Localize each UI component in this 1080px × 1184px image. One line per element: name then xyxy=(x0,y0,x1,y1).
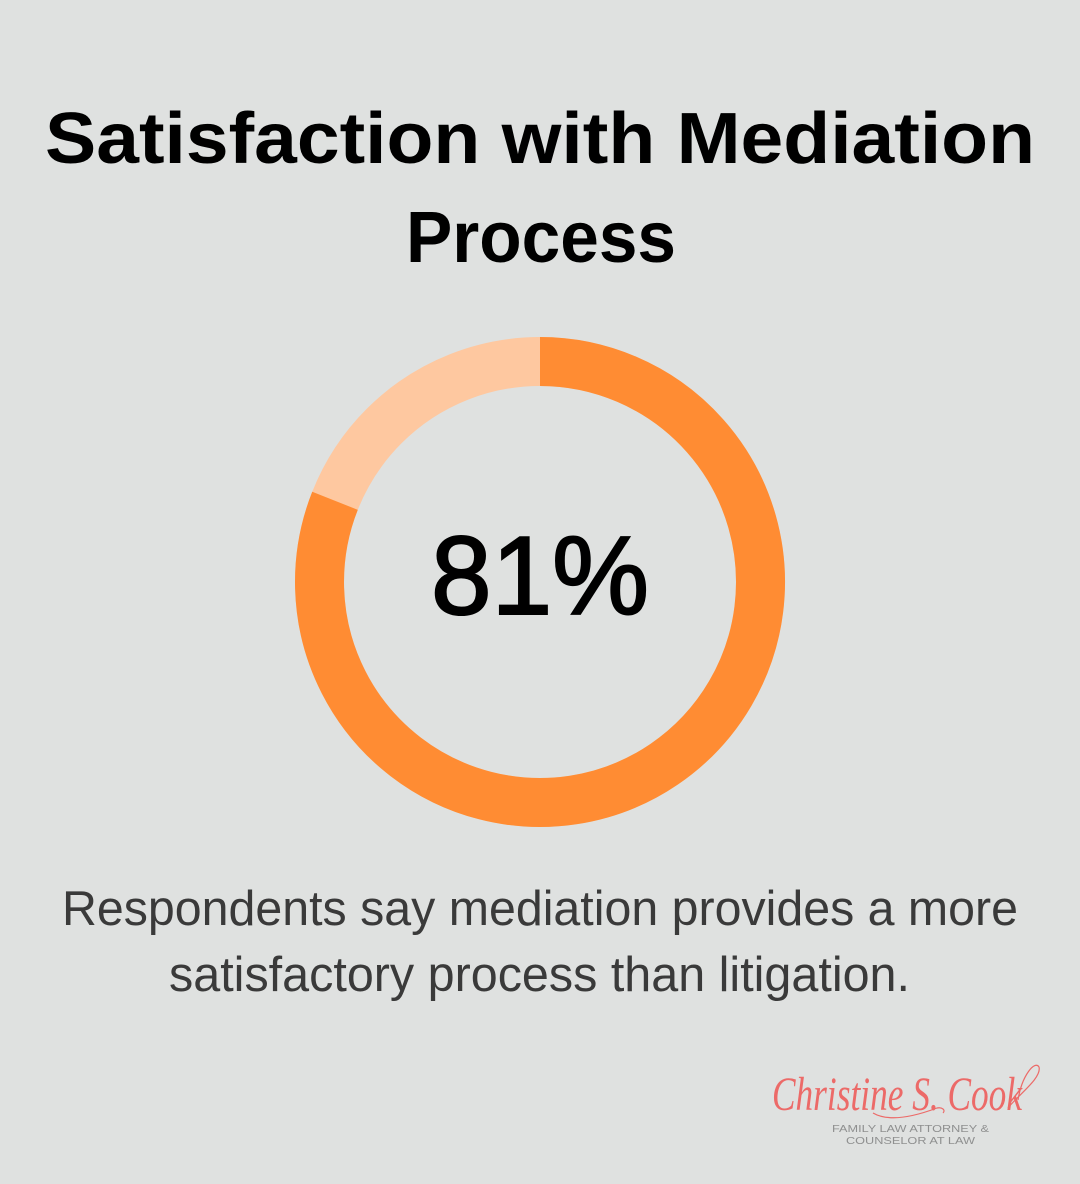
donut 81% segment xyxy=(320,362,761,802)
donut remainder segment xyxy=(320,362,760,802)
donut chart: 81% xyxy=(320,362,761,802)
logo: Christine S. Cook: COUNSELOR AT LAW xyxy=(846,1135,975,1147)
title xyxy=(45,99,1035,278)
center value: 81% xyxy=(431,514,649,638)
description text: Respondents say mediation provides a more xyxy=(62,882,1018,936)
title: Process xyxy=(406,198,676,278)
logo: Christine S. Cook: FAMILY LAW ATTORNEY & xyxy=(832,1123,989,1135)
logo: Christine S. Cook xyxy=(772,1065,1039,1147)
description text xyxy=(62,882,1018,1002)
title: Satisfaction with Mediation xyxy=(45,99,1035,179)
description text: satisfactory process than litigation. xyxy=(169,948,910,1002)
